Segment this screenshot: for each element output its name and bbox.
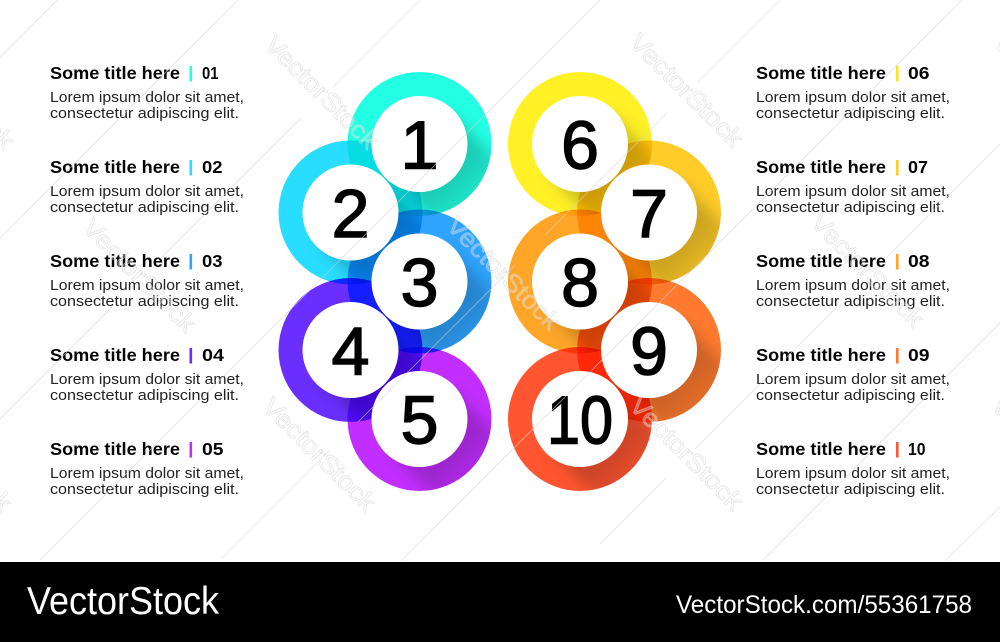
number disc 10 bbox=[532, 371, 628, 467]
number disc 1 bbox=[372, 96, 468, 192]
right text: item 10: consectetur adipiscing elit. bbox=[756, 481, 945, 498]
number disc 10: 10 bbox=[547, 382, 613, 458]
ring 3 bbox=[348, 210, 492, 354]
left text: item 05 bbox=[50, 439, 244, 498]
number disc 9 bbox=[601, 302, 697, 398]
right text: item 09: consectetur adipiscing elit. bbox=[756, 387, 945, 404]
ring 4 bbox=[278, 278, 422, 422]
ring 10 bbox=[508, 347, 652, 491]
number disc 6 bbox=[532, 96, 628, 192]
left text: item 02: consectetur adipiscing elit. bbox=[50, 199, 239, 216]
watermark text bbox=[0, 28, 1000, 517]
left text: item 03: consectetur adipiscing elit. bbox=[50, 293, 239, 310]
right text: item 06 bbox=[756, 63, 950, 122]
right text: item 06: consectetur adipiscing elit. bbox=[756, 105, 945, 122]
left text: item 05: 05 bbox=[202, 439, 224, 459]
number disc 6: 6 bbox=[561, 108, 599, 184]
number disc 5 bbox=[372, 371, 468, 467]
number disc 2: 2 bbox=[332, 176, 369, 252]
right text: item 06: 06 bbox=[908, 63, 930, 83]
watermark text: VectorStock bbox=[624, 391, 749, 516]
right text: item 06: Some title here bbox=[756, 63, 886, 83]
left text: item 04 bbox=[50, 345, 244, 404]
watermark text: VectorStock bbox=[257, 392, 382, 517]
number disc 2 bbox=[302, 164, 398, 260]
right text: item 09: Some title here bbox=[756, 345, 886, 365]
watermark text: VectorStock bbox=[624, 28, 749, 153]
left text: item 01: consectetur adipiscing elit. bbox=[50, 105, 239, 122]
right text: item 08: 08 bbox=[908, 251, 930, 271]
left text: item 02: Lorem ipsum dolor sit amet, bbox=[50, 183, 244, 200]
right text: item 08: Some title here bbox=[756, 251, 886, 271]
ring 5 bbox=[348, 347, 492, 491]
left text: item 05: consectetur adipiscing elit. bbox=[50, 481, 239, 498]
number disc 4 bbox=[302, 302, 398, 398]
left text: item 03: Lorem ipsum dolor sit amet, bbox=[50, 277, 244, 294]
left text: item 04: consectetur adipiscing elit. bbox=[50, 387, 239, 404]
number disc 1: 1 bbox=[401, 108, 438, 184]
right text: item 10: Some title here bbox=[756, 439, 886, 459]
number disc 9: 9 bbox=[630, 314, 668, 390]
footer logo text: VectorStock bbox=[27, 580, 219, 623]
number disc 3 bbox=[372, 234, 468, 330]
right text: item 08: consectetur adipiscing elit. bbox=[756, 293, 945, 310]
right text: item 07: Some title here bbox=[756, 157, 886, 177]
right text: item 07 bbox=[756, 157, 950, 216]
right text: item 06: Lorem ipsum dolor sit amet, bbox=[756, 89, 950, 106]
ring 8 bbox=[508, 210, 652, 354]
right text: item 08: Lorem ipsum dolor sit amet, bbox=[756, 277, 950, 294]
left text: item 02 bbox=[50, 157, 244, 216]
left text: item 01: Some title here bbox=[50, 63, 180, 83]
left text: item 01: 01 bbox=[202, 63, 219, 83]
right text: item 09: 09 bbox=[908, 345, 930, 365]
left text: item 04: Some title here bbox=[50, 345, 180, 365]
ring 2 bbox=[278, 140, 422, 284]
left text: item 03: Some title here bbox=[50, 251, 180, 271]
right text: item 10 bbox=[756, 439, 950, 498]
right text: item 07: consectetur adipiscing elit. bbox=[756, 199, 945, 216]
watermark text: VectorStock bbox=[441, 211, 566, 336]
left text: item 05: Lorem ipsum dolor sit amet, bbox=[50, 465, 244, 482]
watermark text: VectorStock bbox=[259, 30, 384, 155]
number disc 7 bbox=[601, 164, 697, 260]
left text: item 04: 04 bbox=[202, 345, 224, 365]
left text: item 03 bbox=[50, 251, 244, 310]
left text: item 01 bbox=[50, 63, 244, 122]
ring inner shadows bbox=[319, 113, 771, 541]
right text: item 07: Lorem ipsum dolor sit amet, bbox=[756, 183, 950, 200]
number disc 7: 7 bbox=[630, 176, 668, 252]
number disc 3: 3 bbox=[401, 245, 438, 321]
ring 9 bbox=[577, 278, 721, 422]
left text: item 04: Lorem ipsum dolor sit amet, bbox=[50, 371, 244, 388]
number disc 8 bbox=[532, 234, 628, 330]
right text: item 09 bbox=[756, 345, 950, 404]
left text: item 01: Lorem ipsum dolor sit amet, bbox=[50, 89, 244, 106]
number disc 5: 5 bbox=[401, 382, 438, 458]
ring 7 bbox=[577, 140, 721, 284]
left text: item 05: Some title here bbox=[50, 439, 180, 459]
right text: item 10: 10 bbox=[908, 439, 926, 459]
left text: item 02: Some title here bbox=[50, 157, 180, 177]
left text: item 03: 03 bbox=[202, 251, 223, 271]
left text: item 02: 02 bbox=[202, 157, 223, 177]
right text: item 10: Lorem ipsum dolor sit amet, bbox=[756, 465, 950, 482]
number disc 8: 8 bbox=[561, 245, 599, 321]
right text: item 09: Lorem ipsum dolor sit amet, bbox=[756, 371, 950, 388]
ring 1 bbox=[348, 72, 492, 216]
watermark text: VectorStock bbox=[77, 213, 202, 338]
number disc 4: 4 bbox=[332, 314, 369, 390]
footer image id: VectorStock.com/55361758 bbox=[676, 591, 972, 619]
ring 6 bbox=[508, 72, 652, 216]
watermark text: VectorStock bbox=[805, 208, 930, 333]
footer bar bbox=[0, 562, 1000, 642]
right text: item 08 bbox=[756, 251, 950, 310]
right text: item 07: 07 bbox=[908, 157, 928, 177]
